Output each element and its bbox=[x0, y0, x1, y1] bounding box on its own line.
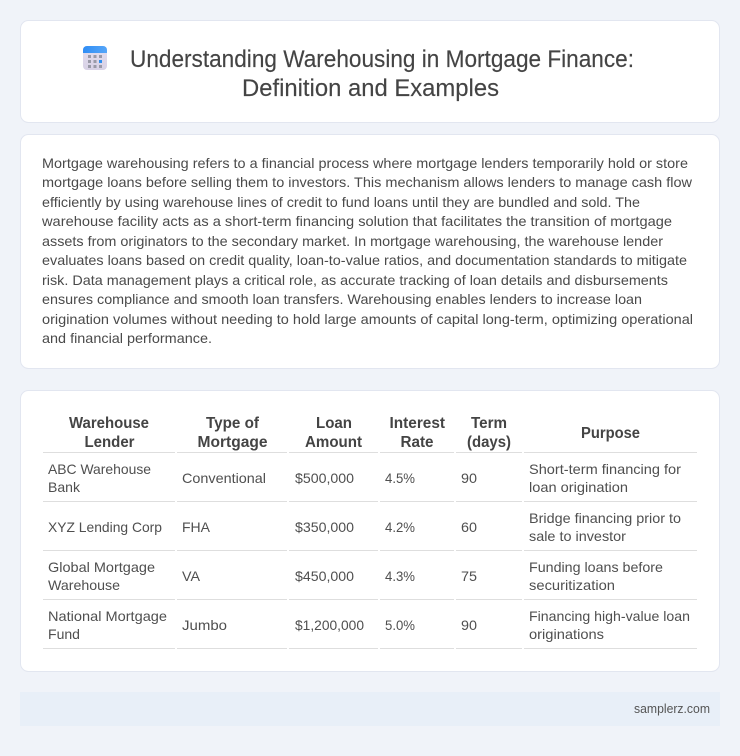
table header row: Amount bbox=[305, 434, 363, 451]
table row: XYZ Lending Corp: $350,000 bbox=[295, 519, 354, 535]
table row: Global Mortgage Warehouse: Warehouse bbox=[48, 577, 120, 593]
table header row: (days) bbox=[467, 434, 511, 451]
description text block bbox=[41, 155, 693, 346]
table row: National Mortgage Fund: 5.0% bbox=[385, 617, 415, 633]
panel: description bbox=[20, 134, 720, 368]
table row: Global Mortgage Warehouse: 75 bbox=[461, 568, 477, 584]
table row: ABC Warehouse Bank: ABC Warehouse bbox=[48, 461, 151, 477]
description text block: origination volumes without needing to hold large amounts of capital long-term, optimizing operational bbox=[42, 311, 693, 327]
description text block: efficiently by using warehouse lines of credit to fund loans until they are bundled and sold. The bbox=[42, 194, 640, 210]
table header row: Loan bbox=[316, 415, 352, 432]
table row: ABC Warehouse Bank: Bank bbox=[48, 479, 81, 495]
table row: XYZ Lending Corp: 60 bbox=[461, 519, 477, 535]
icon: calendar bbox=[83, 46, 107, 70]
table header row bbox=[69, 415, 640, 451]
description text block: assets from originators to the secondary market. In mortgage warehousing, the warehouse lender bbox=[42, 233, 663, 249]
title: Definition and Examples bbox=[242, 75, 499, 102]
table row: National Mortgage Fund: National Mortgage bbox=[48, 608, 167, 624]
panel: table bbox=[20, 390, 720, 672]
description text block: ensures compliance and smooth loan transfers. Warehousing enables lenders to increase loan bbox=[42, 291, 642, 307]
table row: XYZ Lending Corp: Bridge financing prior to bbox=[529, 510, 681, 526]
footer source text: samplerz.com bbox=[634, 701, 710, 716]
table row: ABC Warehouse Bank: loan origination bbox=[529, 479, 628, 495]
table row: Global Mortgage Warehouse: VA bbox=[182, 568, 201, 584]
table row: ABC Warehouse Bank: Conventional bbox=[182, 470, 266, 486]
table row: ABC Warehouse Bank: 4.5% bbox=[385, 470, 415, 486]
table header row: Lender bbox=[84, 434, 134, 451]
table row: Global Mortgage Warehouse: Global Mortgage bbox=[48, 559, 155, 575]
table row: ABC Warehouse Bank: $500,000 bbox=[295, 470, 354, 486]
description text block: risk. Data management plays a critical role, as accurate tracking of loan details and disbursements bbox=[42, 272, 668, 288]
table row: National Mortgage Fund: 90 bbox=[461, 617, 477, 633]
table header row: Interest bbox=[390, 415, 446, 432]
table row: Global Mortgage Warehouse bbox=[48, 559, 663, 593]
table row: ABC Warehouse Bank bbox=[48, 461, 681, 495]
table row: National Mortgage Fund: $1,200,000 bbox=[295, 617, 364, 633]
table header row: Type of bbox=[206, 415, 260, 432]
table row: XYZ Lending Corp: XYZ Lending Corp bbox=[48, 519, 162, 535]
description text block: and financial performance. bbox=[42, 330, 212, 346]
description text block: evaluates loans based on credit quality, loan-to-value ratios, and documentation standards to mitigate bbox=[42, 252, 687, 268]
table row: Global Mortgage Warehouse: Funding loans before bbox=[529, 559, 663, 575]
description text block: warehouse facility acts as a short-term financing solution that facilitates the transition of mortgage bbox=[41, 213, 672, 229]
table row: XYZ Lending Corp: 4.2% bbox=[385, 519, 415, 535]
table row: National Mortgage Fund: Financing high-value loan bbox=[529, 608, 690, 624]
title bbox=[130, 46, 634, 102]
table row: National Mortgage Fund: originations bbox=[529, 626, 604, 642]
table header row: Rate bbox=[400, 434, 434, 451]
footer bar bbox=[20, 692, 720, 726]
table header row: Mortgage bbox=[198, 434, 268, 451]
description text block: mortgage loans before selling them to investors. This mechanism allows lenders to manage cash flow bbox=[42, 174, 693, 190]
table row: National Mortgage Fund bbox=[48, 608, 690, 642]
table row: ABC Warehouse Bank: 90 bbox=[461, 470, 477, 486]
table header row: Purpose bbox=[581, 425, 640, 442]
title: Understanding Warehousing in Mortgage Finance: bbox=[130, 46, 634, 73]
table row: XYZ Lending Corp: FHA bbox=[182, 519, 211, 535]
table header row: Term bbox=[471, 415, 507, 432]
description text block: Mortgage warehousing refers to a financial process where mortgage lenders temporarily hold or store bbox=[42, 155, 688, 171]
header panel bbox=[20, 20, 720, 122]
table row: Global Mortgage Warehouse: $450,000 bbox=[295, 568, 354, 584]
table row: National Mortgage Fund: Fund bbox=[48, 626, 80, 642]
table header row: Warehouse bbox=[69, 415, 149, 432]
table row: Global Mortgage Warehouse: 4.3% bbox=[385, 568, 415, 584]
table row lines bbox=[43, 452, 697, 649]
table row: XYZ Lending Corp bbox=[48, 510, 681, 544]
table row: XYZ Lending Corp: sale to investor bbox=[529, 528, 626, 544]
table row: National Mortgage Fund: Jumbo bbox=[182, 617, 227, 633]
table row: ABC Warehouse Bank: Short-term financing for bbox=[529, 461, 681, 477]
table row: Global Mortgage Warehouse: securitization bbox=[529, 577, 615, 593]
